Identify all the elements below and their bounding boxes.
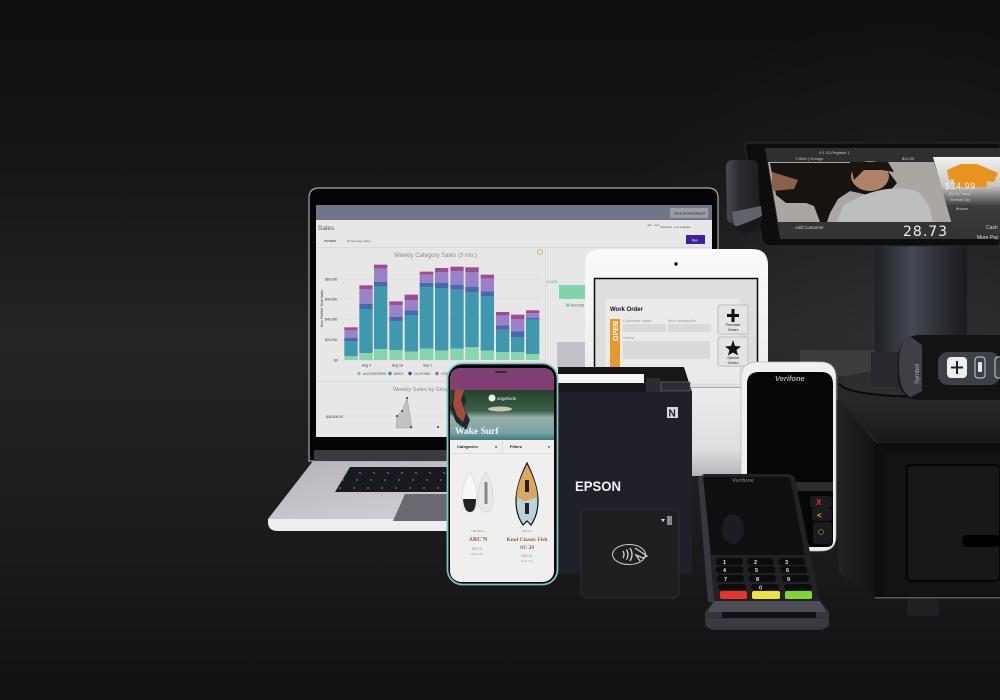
reader body xyxy=(581,509,679,598)
total amount: 28.73 xyxy=(903,224,948,240)
product meta: Remote Qty xyxy=(950,198,970,202)
chart title: Weekly Category Sales (3 mo.) xyxy=(394,253,477,259)
product labels: Excl. tax xyxy=(521,559,533,563)
keypad: 3 xyxy=(785,560,788,566)
device: laptop xyxy=(268,188,718,531)
button: purchase orders xyxy=(718,305,748,334)
colour keys xyxy=(720,591,812,599)
product labels: KNOLL xyxy=(522,529,532,533)
terminal brand: Verifone xyxy=(732,478,754,484)
keypad: 7 xyxy=(724,577,727,583)
second chart: $45,000.00 xyxy=(326,415,343,419)
top bar text: V.1.31 Register 1 xyxy=(819,150,850,155)
drawer side xyxy=(838,397,876,598)
laptop base xyxy=(268,461,640,530)
open status tab xyxy=(610,319,620,391)
product: white boards xyxy=(462,472,493,512)
keypad xyxy=(716,558,812,592)
plus key xyxy=(947,357,967,378)
card swipe xyxy=(726,160,762,234)
indicator key xyxy=(975,357,985,378)
device: barcode scanner xyxy=(898,335,1000,400)
scanner brand: Symbol xyxy=(915,364,921,384)
device: card reader xyxy=(581,509,679,598)
payment labels xyxy=(977,225,999,241)
side metric card: 44.89% xyxy=(546,280,558,284)
contactless icon xyxy=(612,544,647,564)
form fields: Item description xyxy=(668,318,696,323)
indicator keys: < xyxy=(817,511,822,520)
trackpad xyxy=(393,494,560,521)
drawer top xyxy=(838,376,1000,443)
keypad: 1 xyxy=(723,560,726,566)
terminal body xyxy=(698,474,820,602)
terminal base xyxy=(705,601,829,630)
phone screen xyxy=(450,368,554,582)
camera xyxy=(674,262,678,266)
Epson logo: EPSON xyxy=(575,478,621,494)
phone frame xyxy=(448,364,558,584)
side metric card: ACCESS xyxy=(571,304,584,308)
product meta: Qty On Hand xyxy=(948,192,970,196)
hero image xyxy=(450,390,554,440)
indicator keys: X xyxy=(816,498,822,507)
chart legend: COMPONENTS xyxy=(441,372,464,376)
NFC mark: N xyxy=(668,408,676,420)
device: Verifone handheld xyxy=(741,362,836,551)
axis labels xyxy=(320,278,432,368)
filter row: FILTERS xyxy=(324,239,336,243)
filter row: Selected - Los Angeles xyxy=(660,225,691,229)
printer top xyxy=(558,367,692,392)
device: Verifone payment terminal xyxy=(698,474,829,630)
product labels: $55.00 xyxy=(472,547,482,551)
brand label: Verifone xyxy=(775,374,805,383)
button: special orders: Special xyxy=(727,356,739,360)
axis labels: Aug 4 xyxy=(362,364,371,368)
keypad: 6 xyxy=(786,568,789,574)
button: purchase orders: Orders xyxy=(728,328,739,332)
device: POS stand xyxy=(839,246,1000,397)
axis labels: $20,000 xyxy=(325,338,337,342)
chart legend: ACCESSORIES xyxy=(363,372,386,376)
run button: Run xyxy=(692,238,698,242)
chart legend: BIKES xyxy=(394,372,403,376)
top bar text: T-Shirt | Orange xyxy=(795,156,824,161)
control strip xyxy=(938,352,1000,385)
top bar text xyxy=(795,150,915,161)
product labels: $99.00 xyxy=(522,554,532,558)
filter bar: v xyxy=(548,444,551,449)
keypad: 2 xyxy=(754,560,757,566)
product labels: LIB TECH xyxy=(471,529,485,533)
work order title: Work Order xyxy=(610,307,644,313)
hero image: Wake Surf xyxy=(455,427,499,437)
counter surface behind devices xyxy=(800,350,1000,400)
terminal left edge xyxy=(698,474,714,602)
drawer front xyxy=(875,443,1000,598)
drawer slot xyxy=(962,535,1000,547)
top bar text: $24.99 xyxy=(902,156,915,161)
hero image: angelside xyxy=(497,396,517,401)
form fields: Notes xyxy=(623,335,633,340)
indicator keys xyxy=(810,496,832,544)
device: Epson printer xyxy=(558,367,692,574)
filter bar: v xyxy=(495,444,498,449)
keypad: 8 xyxy=(756,577,759,583)
product labels: Knol Classic Fish xyxy=(507,537,547,543)
axis labels: $60,000 xyxy=(325,278,337,282)
button: purchase orders: Purchase xyxy=(726,323,740,327)
axis labels: Sep 1 xyxy=(423,364,432,368)
device: cash drawer xyxy=(800,350,1000,616)
keypad: 4 xyxy=(723,568,727,574)
drawer foot xyxy=(907,599,939,616)
filter row: Drop to any value xyxy=(347,239,371,243)
laptop lid xyxy=(309,188,718,461)
tablet body xyxy=(745,143,1000,246)
save report button xyxy=(670,208,708,218)
product meta: Bronze xyxy=(956,207,968,211)
app header xyxy=(316,205,712,220)
axis labels: $0 xyxy=(334,358,338,362)
work order card xyxy=(605,298,740,384)
keypad: 5 xyxy=(755,568,758,574)
drawer inset xyxy=(907,465,1000,581)
second chart xyxy=(326,397,447,428)
price label: $24.99 xyxy=(945,181,976,191)
phone header xyxy=(450,368,554,390)
tablet screen xyxy=(765,148,1000,239)
chart gridlines xyxy=(340,279,542,360)
run button xyxy=(686,235,705,244)
product labels: Excl. tax xyxy=(471,552,483,556)
handheld white shell xyxy=(741,362,836,551)
filter bar: Filters xyxy=(510,444,523,449)
open status tab: OPEN xyxy=(613,321,620,341)
scanner end cap xyxy=(899,337,922,397)
tablet body xyxy=(585,249,768,476)
bottom bar xyxy=(778,222,956,239)
side metric card xyxy=(546,280,589,368)
button: special orders: Orders xyxy=(728,361,739,365)
button: special orders xyxy=(718,337,748,366)
stand post xyxy=(875,246,967,354)
product labels: ARC'N xyxy=(468,537,488,543)
second chart title: Weekly Sales by Shoppers xyxy=(393,387,460,393)
keypad: 0 xyxy=(759,586,762,592)
chart legend: CLOTHING xyxy=(414,372,431,376)
product labels: SU 29 xyxy=(520,545,534,551)
form fields xyxy=(623,318,711,359)
keypad: 9 xyxy=(787,577,790,583)
second indicator key xyxy=(995,357,1000,378)
scanner body xyxy=(898,335,1000,400)
stacked bar chart xyxy=(344,265,539,360)
save report button: Save As New Report xyxy=(674,212,705,216)
axis labels: $40,000 xyxy=(325,298,337,302)
product panel xyxy=(933,157,1000,239)
product labels xyxy=(468,529,547,563)
device: white tablet xyxy=(585,249,768,476)
device: smartphone xyxy=(448,364,558,584)
product meta xyxy=(948,192,970,211)
terminal screen xyxy=(703,477,805,555)
page title: Sales xyxy=(318,225,335,232)
handheld screen xyxy=(747,372,833,547)
NFC mark xyxy=(667,407,678,420)
add customer: Add Customer xyxy=(795,225,824,230)
axis labels: $40,000 xyxy=(325,318,337,322)
filter row xyxy=(324,223,691,243)
tablet screen frame xyxy=(594,278,758,388)
laptop screen xyxy=(316,205,712,437)
hinge xyxy=(314,450,710,461)
product: fish surfboard xyxy=(516,463,538,525)
stand base xyxy=(839,368,1000,396)
printer body xyxy=(558,392,692,574)
payment labels: More Pay xyxy=(977,235,999,241)
filter row: Jan - Jun xyxy=(647,223,660,227)
chart legend xyxy=(357,372,464,376)
filter bar: Categories xyxy=(457,444,478,449)
payment labels: Cash xyxy=(986,225,998,231)
keyboard xyxy=(335,467,560,492)
filter bar xyxy=(457,444,551,449)
form fields: Customer name xyxy=(623,318,652,323)
axis labels: Kiss, Felt/All: Total Sales xyxy=(320,290,324,327)
axis labels: Aug 18 xyxy=(392,364,403,368)
device: POS tablet xyxy=(726,143,1000,246)
customer photo xyxy=(768,161,952,222)
t-shirt product xyxy=(947,164,998,187)
